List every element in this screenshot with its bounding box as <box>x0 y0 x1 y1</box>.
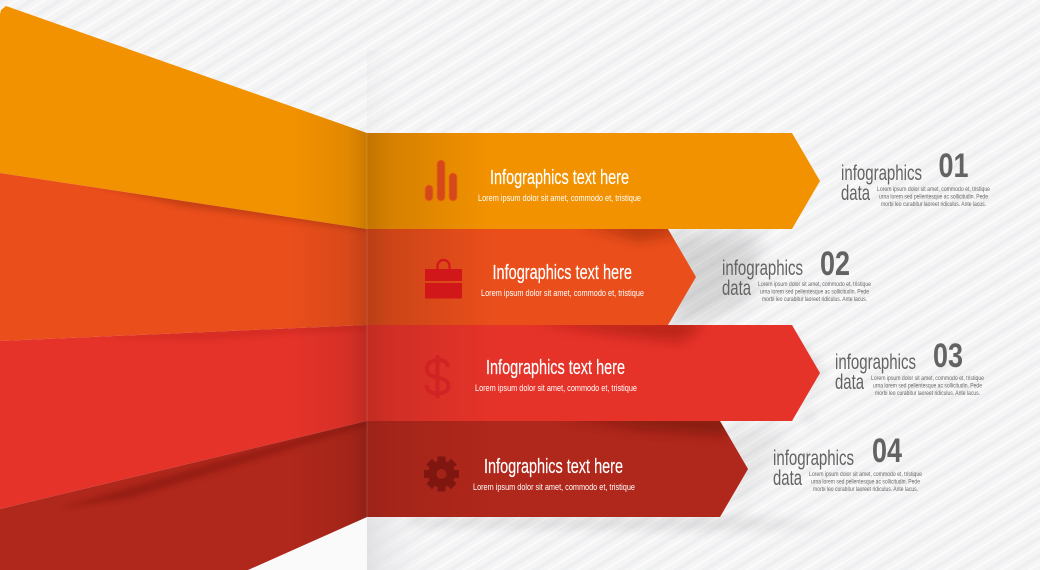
banner 4 text: Infographics text here <box>484 456 623 478</box>
soft shadows on background <box>400 232 850 530</box>
data block 01: 01 <box>938 147 968 185</box>
data block 03: data <box>835 371 864 394</box>
data block 03: urna lorem sed pellentesque ac sollicitudin. Pede <box>873 384 983 390</box>
data block 02: urna lorem sed pellentesque ac sollicitudin. Pede <box>760 290 870 296</box>
icon: bar chart <box>425 160 457 201</box>
panel: left folded bands <box>0 6 367 570</box>
arrow banner 2 <box>367 224 696 325</box>
fold line <box>366 133 368 517</box>
banner 2 text: Infographics text here <box>492 262 632 284</box>
data block 04: morbi leo curabitur laoreet ridiculus. Ante lacus. <box>813 487 918 493</box>
data block 02 <box>722 245 872 303</box>
data block 03: Lorem ipsum dolor sit amet, commodo et, tristique <box>871 376 985 382</box>
data block 02: morbi leo curabitur laoreet ridiculus. Ante lacus. <box>762 297 867 303</box>
data block 01: infographics <box>841 162 922 185</box>
band: orange <box>0 6 367 229</box>
data block 02: Lorem ipsum dolor sit amet, commodo et, tristique <box>758 282 872 288</box>
data block 01: Lorem ipsum dolor sit amet, commodo et, tristique <box>877 187 991 193</box>
arrow banner 3 <box>367 320 820 421</box>
data block 04: 04 <box>872 432 902 470</box>
banner 3 text: Lorem ipsum dolor sit amet, commodo et, tristique <box>475 383 637 394</box>
data block 03: infographics <box>835 351 916 374</box>
data block 02: infographics <box>722 257 803 280</box>
band: dark red <box>0 421 367 570</box>
banner 4 text: Lorem ipsum dolor sit amet, commodo et, tristique <box>473 482 635 493</box>
icon: gear <box>424 456 459 492</box>
data block 01 <box>841 147 991 208</box>
arrow banner 1 <box>367 133 820 229</box>
data block 01: urna lorem sed pellentesque ac sollicitudin. Pede <box>879 194 989 200</box>
data block 04 <box>773 432 923 493</box>
data block 03: morbi leo curabitur laoreet ridiculus. Ante lacus. <box>875 391 980 397</box>
data block 04: data <box>773 467 802 490</box>
banner 1 text: Infographics text here <box>490 167 629 189</box>
band: red <box>0 325 367 509</box>
band: orange-red <box>0 173 367 341</box>
data block 04: Lorem ipsum dolor sit amet, commodo et, tristique <box>809 472 923 478</box>
icon: briefcase <box>425 260 462 298</box>
banner 1 text: Lorem ipsum dolor sit amet, commodo et, tristique <box>478 193 641 204</box>
data block 02: data <box>722 277 751 300</box>
data block 04: infographics <box>773 447 854 470</box>
banner 3 text: Infographics text here <box>486 357 625 379</box>
banner 4 text <box>473 456 635 493</box>
data block 04: urna lorem sed pellentesque ac sollicitudin. Pede <box>811 480 921 486</box>
shading near the fold <box>76 117 367 533</box>
banner 2 text: Lorem ipsum dolor sit amet, commodo et, tristique <box>481 288 644 299</box>
data block 01: morbi leo curabitur laoreet ridiculus. Ante lacus. <box>881 202 986 208</box>
icon: dollar sign <box>426 355 448 398</box>
data block 03: 03 <box>933 337 963 375</box>
data block 01: data <box>841 182 870 205</box>
banner 1 text <box>478 167 641 204</box>
banner 2 text <box>481 262 644 299</box>
data block 03 <box>835 337 985 397</box>
data block 02: 02 <box>820 245 850 283</box>
arrow banner 4 <box>367 416 748 517</box>
banner 3 text <box>475 357 637 394</box>
